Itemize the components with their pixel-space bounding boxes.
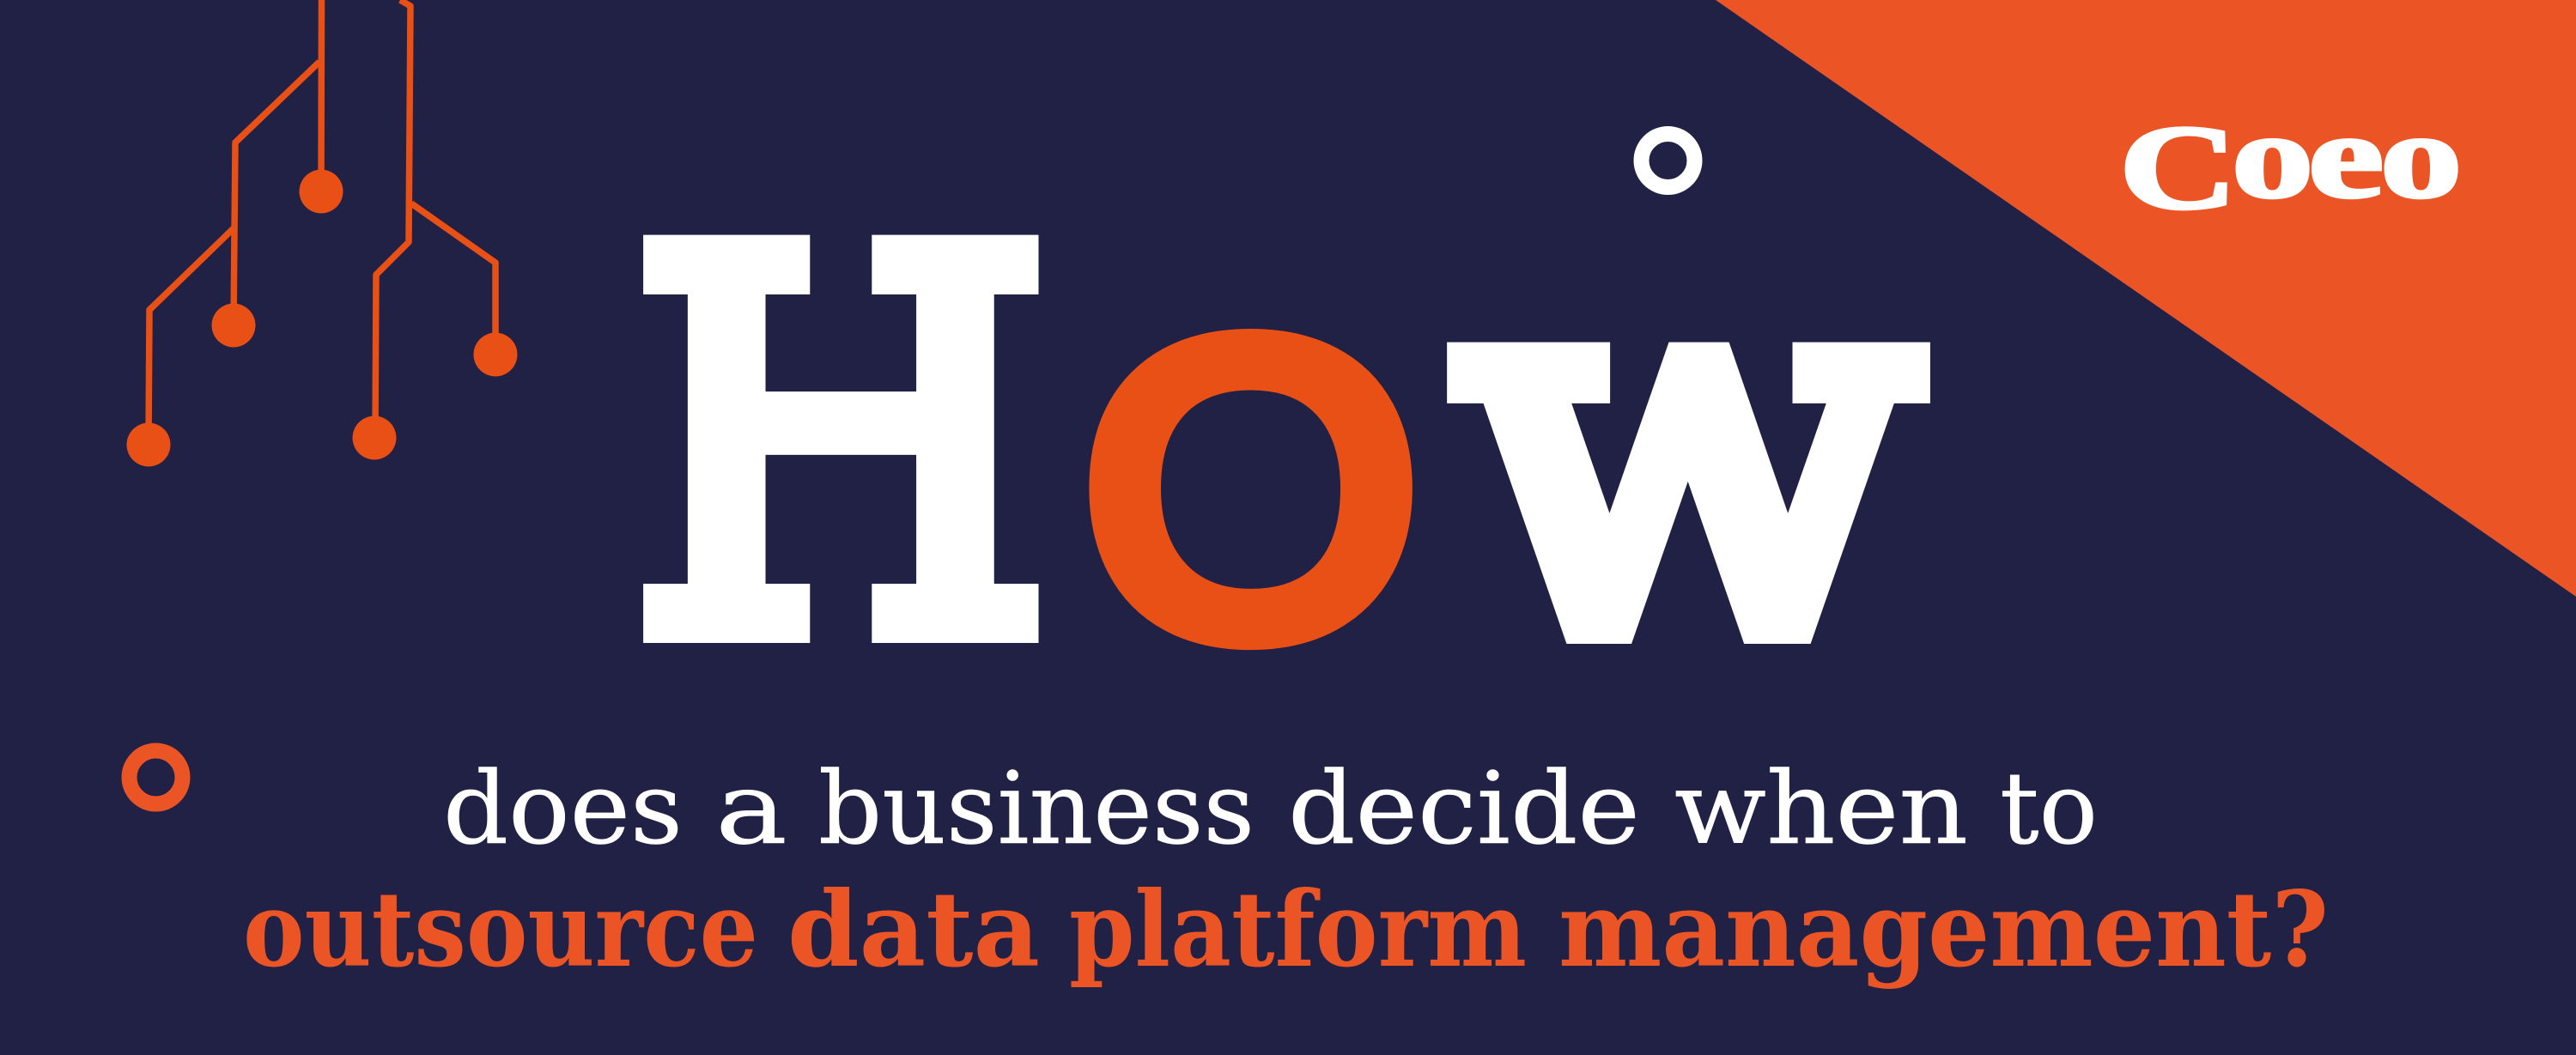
subtitle line 2	[243, 868, 2329, 991]
title: How: H	[632, 149, 1050, 749]
icon: white ring	[1642, 134, 1695, 187]
subtitle line 1: decide	[1288, 751, 1640, 867]
logo: Coeo: e	[2308, 90, 2384, 223]
subtitle line 2: management?	[1558, 868, 2329, 991]
subtitle line 1: to	[2000, 751, 2098, 867]
logo: Coeo: o	[2380, 90, 2462, 223]
subtitle line 1	[443, 751, 2098, 867]
logo: Coeo: C	[2119, 101, 2238, 234]
logo: Coeo	[2119, 90, 2462, 234]
title: How: O	[1084, 259, 1417, 718]
icon: orange ring	[129, 750, 182, 803]
orange corner triangle	[1716, 0, 2576, 597]
logo: Coeo: o	[2232, 90, 2313, 223]
title: How: w	[1456, 149, 1919, 749]
title: How	[632, 149, 1919, 749]
subtitle line 2: outsource	[243, 868, 758, 991]
subtitle line 1: a	[715, 751, 787, 867]
subtitle line 1: when	[1674, 751, 1968, 867]
subtitle line 2: platform	[1069, 868, 1527, 991]
subtitle line 1: business	[818, 751, 1255, 867]
icon: circuit tree	[127, 0, 517, 467]
subtitle line 1: does	[443, 751, 683, 867]
subtitle line 2: data	[787, 868, 1040, 991]
